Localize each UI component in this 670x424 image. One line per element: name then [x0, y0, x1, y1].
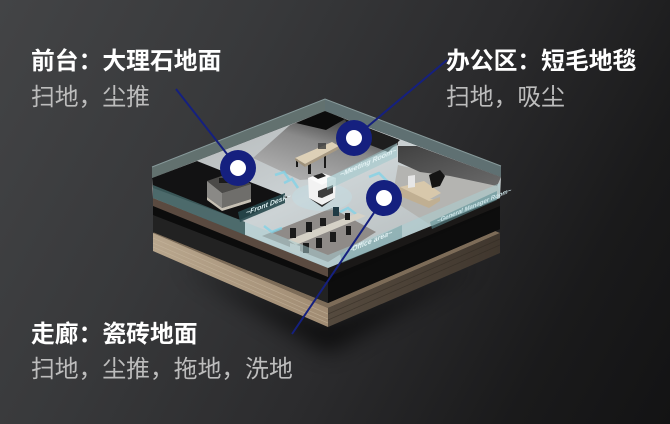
marker: office	[336, 120, 372, 156]
icon: conference table	[295, 142, 339, 174]
text block: office	[446, 48, 636, 111]
text block: front desk: 前台：大理石地面	[31, 48, 221, 75]
icon: cleaning robot	[292, 173, 352, 211]
text block: front desk	[31, 48, 221, 111]
back glass walls	[152, 99, 501, 178]
layer: black foam underlay	[153, 135, 500, 303]
glass wall: general manager label: ~General Manager Room~	[437, 187, 512, 225]
floor: front desk black marble	[152, 161, 288, 220]
marker: corridor	[366, 180, 402, 216]
glass wall: office front	[245, 183, 500, 268]
glass wall: office label: ~Office area~	[348, 227, 393, 255]
floor: office area	[262, 208, 376, 262]
callout line: office	[354, 60, 447, 138]
glass wall: front desk label: ~Front Desk~	[246, 191, 291, 217]
text block: front desk: 扫地，尘推	[31, 84, 150, 111]
marker: front desk	[220, 150, 256, 186]
glass wall: office label	[340, 225, 402, 263]
glass wall: meeting room label: ~Meeting Room~	[340, 145, 397, 179]
layer: floor slab edge	[153, 198, 500, 277]
floor: general manager room	[392, 146, 501, 226]
icon: office desks and chairs	[288, 207, 366, 255]
glass wall: meeting room label	[327, 143, 397, 190]
text block: office: 办公区：短毛地毯	[446, 48, 636, 75]
text block: office: 扫地，吸尘	[446, 84, 565, 111]
glass wall: front desk label	[238, 191, 291, 222]
text block: corridor: 走廊：瓷砖地面	[31, 321, 198, 348]
icon: front desk	[207, 172, 251, 211]
callout line: front desk	[176, 89, 238, 168]
text block: corridor: 扫地，尘推，拖地，洗地	[31, 356, 293, 383]
floor: marble base	[152, 111, 501, 268]
back wall: dark corner	[296, 111, 400, 152]
glass wall: front desk	[153, 185, 245, 235]
layer: wood base	[153, 165, 500, 327]
cyan floor markers	[264, 172, 387, 232]
floor: meeting room	[253, 111, 398, 180]
shadow under model	[180, 262, 480, 352]
icon: manager desk and chair	[400, 170, 445, 208]
text block: corridor	[31, 321, 293, 383]
callout line: corridor	[292, 198, 384, 334]
